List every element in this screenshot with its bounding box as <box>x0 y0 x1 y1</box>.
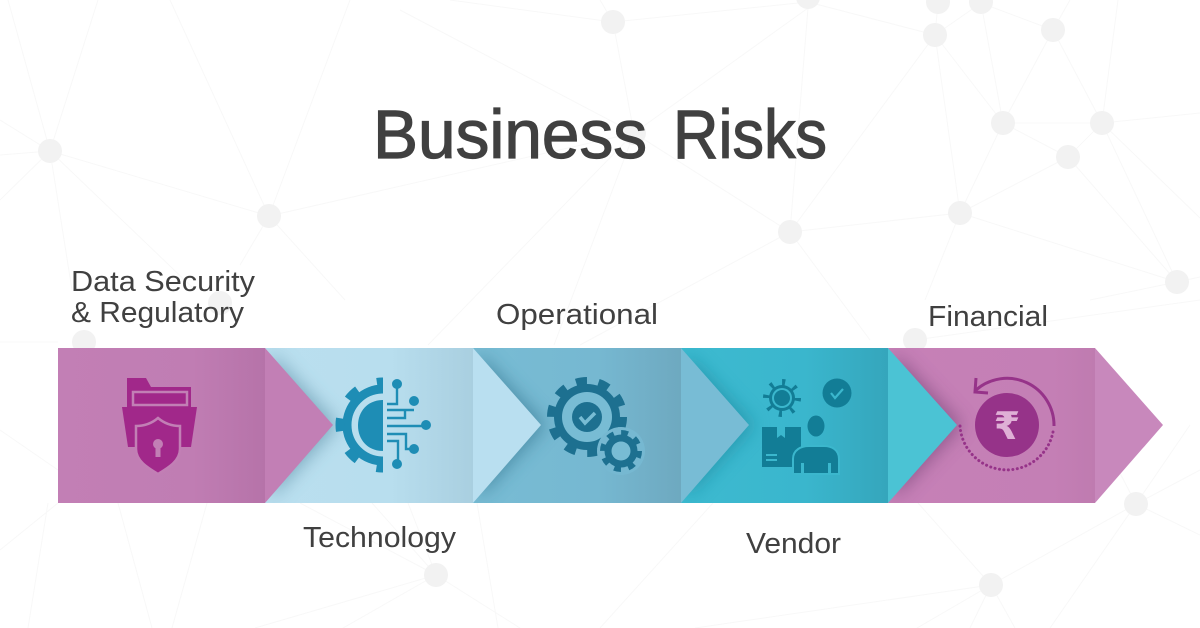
segment: operational <box>473 348 681 503</box>
icon: folder with shield <box>122 378 197 474</box>
arrow: operational <box>681 348 749 503</box>
label: Operational: Operational <box>496 299 658 331</box>
icon: half gear with circuit <box>340 379 431 469</box>
segment: technology <box>265 348 473 503</box>
label: Technology: Technology <box>303 522 457 554</box>
title <box>373 96 827 173</box>
label: Data Security & Regulatory <box>71 266 256 329</box>
label: Vendor: Vendor <box>746 528 841 560</box>
arrow: data security <box>265 348 333 503</box>
label: Financial: Financial <box>928 301 1048 333</box>
rupee sign: ₹ <box>994 404 1020 448</box>
arrow: technology <box>473 348 541 503</box>
label: Data Security & Regulatory: & Regulatory <box>71 297 245 329</box>
arrow: vendor <box>888 348 957 503</box>
title: Business <box>373 96 647 173</box>
icon: gears with check <box>551 381 645 475</box>
title: Risks <box>673 96 827 173</box>
process ribbon <box>58 348 1163 503</box>
segment: financial <box>888 348 1163 503</box>
icon: vendor person with box <box>762 378 852 474</box>
label: Data Security & Regulatory: Data Security <box>71 266 256 298</box>
icon: rupee with arrow <box>960 378 1054 470</box>
segment: vendor <box>681 348 888 503</box>
segment: data security <box>58 348 265 503</box>
